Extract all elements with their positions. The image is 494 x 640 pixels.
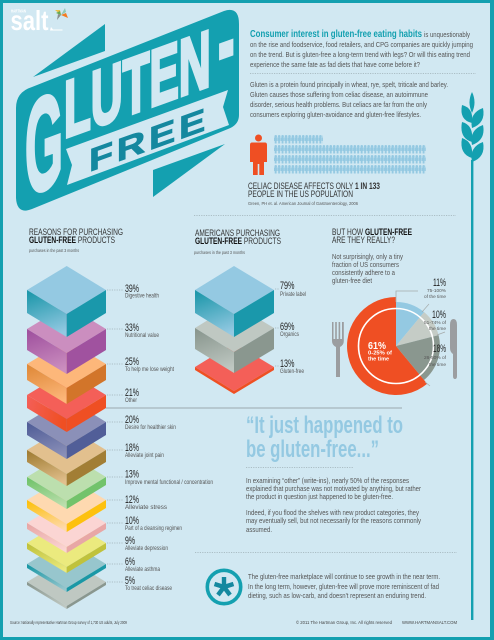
quote explanation text: In examining “other” (write-ins), nearly 50% of the responses — [246, 476, 409, 485]
icon: 1 in 133 people — [250, 134, 426, 175]
panel: Americans purchasing — [194, 228, 306, 394]
icon: orange person — [250, 134, 267, 175]
labels: adherence percentages: 75-100% — [427, 288, 446, 293]
heading: Americans purchasing: GLUTEN-FREE PRODUCTS — [195, 236, 281, 247]
logo: Hartman salt: HARTMAN — [11, 8, 26, 14]
gluten explanation text: Gluten causes those suffering from celiac disease, an autoimmune — [250, 90, 428, 99]
labels: reasons percentages: Part of a cleansing regimen — [125, 525, 182, 532]
heading: reasons — [29, 227, 123, 253]
banner back triangle bottom — [153, 144, 225, 197]
labels: adherence percentages: 18% — [433, 343, 446, 355]
gluten explanation text: Gluten is a protein found principally in wheat, rye, spelt, triticale and barley. — [250, 80, 448, 89]
intro text block: experience the same fate as fad diets that have come before it? — [250, 60, 420, 69]
labels: reasons percentages: 9% — [125, 535, 135, 547]
celiac statistic: Green, PH et. al. American Journal of Gastroenterology, 2006 — [248, 201, 358, 206]
heading: how gluten-free: ARE THEY REALLY? — [332, 235, 395, 246]
heading: Americans purchasing: AMERICANS PURCHASING — [195, 228, 280, 239]
quote explanation text — [246, 476, 421, 534]
celiac statistic: CELIAC DISEASE AFFECTS ONLY 1 IN 133 — [248, 180, 380, 191]
labels: reasons percentages: 21% — [125, 387, 139, 399]
footer — [296, 619, 457, 625]
icon: wheat stalk — [461, 92, 484, 620]
labels: reasons percentages: Alleviate asthma — [125, 566, 160, 573]
icon: fork — [332, 322, 344, 377]
quote explanation text: explained that purchase was not motivated by anything, but rather — [246, 484, 421, 493]
heading: reasons: REASONS FOR PURCHASING — [29, 227, 123, 238]
label: 61 percent: 0-25% of — [368, 350, 392, 356]
labels: Americans percentages: 13% — [280, 358, 295, 370]
heading: how gluten-free: BUT HOW GLUTEN-FREE — [332, 227, 412, 238]
quote explanation text: the product in question just happened to be gluten-free. — [246, 492, 393, 501]
quote explanation text: assumed. — [246, 525, 272, 534]
labels: reasons percentages: 18% — [125, 442, 139, 454]
intro text block — [250, 29, 473, 69]
chart: stacked isometric blocks — [27, 266, 106, 609]
text: adherence intro — [332, 252, 403, 285]
labels: reasons percentages: 39% — [125, 283, 139, 295]
quote explanation text: Indeed, if you flood the shelves with new product categories, they — [246, 508, 419, 517]
labels: Americans percentages: Gluten-free — [280, 368, 304, 375]
labels: adherence percentages: 10% — [432, 309, 446, 321]
labels: adherence percentages: 51-74% of — [424, 320, 447, 325]
labels: reasons percentages: To treat celiac disease — [125, 585, 172, 592]
source note: Source: Nationally representative Hartman Group survey of 1,730 US adults, July 2009 — [10, 620, 127, 625]
banner back triangle top — [33, 24, 105, 77]
panel: reasons for purchasing — [10, 227, 213, 625]
gluten explanation text — [250, 80, 448, 119]
heading letter G: G — [25, 64, 63, 225]
conclusion text: The gluten-free marketplace will continue to see growth in the near term. — [248, 572, 440, 581]
heading: reasons: GLUTEN-FREE PRODUCTS — [29, 235, 115, 246]
heading letters LUTEN: LUTEN — [64, 13, 211, 155]
text: adherence intro: gluten-free diet — [332, 276, 372, 285]
intro text block: Consumer interest in gluten-free eating habits — [250, 29, 422, 40]
labels: adherence percentages: 26-50% of — [424, 355, 447, 360]
banner body — [16, 10, 239, 211]
text: adherence intro: consistently adhere to a — [332, 268, 396, 277]
text: adherence intro: fraction of US consumers — [332, 260, 399, 269]
labels: adherence percentages: of the time — [424, 294, 446, 299]
ribbon — [66, 90, 229, 185]
labels: reasons percentages: Alleviate joint pain — [125, 452, 164, 459]
text: adherence intro: Not surprisingly, only a tiny — [332, 252, 403, 261]
labels: reasons percentages: 33% — [125, 322, 139, 334]
labels: reasons percentages: Digestive health — [125, 292, 159, 300]
labels: adherence percentages: the time — [429, 326, 446, 331]
labels: Americans percentages: 69% — [280, 321, 295, 333]
heading: reasons: purchases in the past 3 months — [29, 248, 80, 253]
quote heading: be gluten-free...” — [246, 436, 379, 463]
labels: adherence percentages: the time — [429, 362, 446, 367]
conclusion text: In the long term, however, gluten-free will prove more reminiscent of fad — [248, 582, 439, 591]
labels: Americans percentages — [280, 280, 306, 375]
labels: reasons percentages: 10% — [125, 515, 139, 527]
label: 61 percent: 61% — [368, 341, 386, 352]
labels: adherence percentages: 11% — [433, 277, 446, 289]
intro text block: is unquestionably — [424, 30, 470, 39]
labels: Americans percentages: Organics — [280, 331, 300, 338]
labels: reasons percentages: Nutritional value — [125, 332, 159, 339]
celiac statistic: PEOPLE IN THE US POPULATION — [248, 188, 353, 199]
labels: reasons percentages: 25% — [125, 356, 139, 368]
quote heading: “It just happened to — [246, 412, 403, 439]
chart: Americans isometric blocks — [195, 266, 274, 394]
icon: asterisk badge — [207, 570, 241, 604]
logo: Hartman salt: salt — [10, 5, 48, 36]
label: 61 percent: the time — [368, 356, 390, 362]
labels: Americans percentages: Private label — [280, 291, 306, 298]
conclusion text: dieting, such as low-carb, and doesn't represent an enduring trend. — [248, 591, 426, 600]
title banner: Gluten-Free — [16, 0, 239, 225]
labels: reasons percentages: Desire for healthier skin — [125, 424, 176, 431]
labels: reasons percentages: Other — [125, 397, 138, 404]
labels: reasons percentages: 6% — [125, 556, 135, 568]
gluten explanation text: consumers exploring gluten-avoidance and gluten-free lifestyles. — [250, 110, 421, 119]
labels: reasons percentages: Alleviate depression — [125, 545, 168, 552]
labels: reasons percentages: Alleviate stress — [125, 504, 168, 511]
panel: how gluten-free really — [332, 227, 457, 395]
labels: reasons percentages: To help me lose weight — [125, 366, 174, 373]
labels: reasons percentages: 20% — [125, 414, 139, 426]
icon: knife — [450, 319, 457, 379]
labels: Americans percentages: 79% — [280, 280, 295, 292]
label: 61 percent — [368, 341, 392, 362]
heading: Americans purchasing — [194, 228, 281, 255]
quote explanation text: may eventually sell, but not necessarily for the reasons commonly — [246, 516, 421, 525]
footer: WWW.HARTMANSALT.COM — [402, 620, 457, 625]
labels: reasons percentages: 12% — [125, 494, 139, 506]
heading: how gluten-free — [332, 227, 412, 246]
labels: reasons percentages: 5% — [125, 575, 135, 587]
celiac statistic — [248, 180, 380, 206]
labels: reasons percentages: Improve mental functional / concentration — [125, 479, 213, 486]
labels: adherence percentages — [424, 277, 447, 367]
quote heading — [246, 412, 403, 463]
labels: reasons percentages: 13% — [125, 468, 139, 480]
ribbon text FREE: FREE — [89, 100, 209, 179]
labels: reasons percentages — [125, 283, 213, 592]
icon: rows of blue people — [274, 135, 426, 174]
chart: adherence pie — [347, 291, 445, 395]
footer: © 2011 The Hartman Group, Inc. All rights reserved — [296, 619, 392, 625]
conclusion text — [248, 572, 440, 600]
gluten explanation text: disorder, serious health problems. But celiacs are far from the only — [250, 100, 427, 109]
heading: Americans purchasing: purchases in the past 3 months — [194, 250, 246, 255]
